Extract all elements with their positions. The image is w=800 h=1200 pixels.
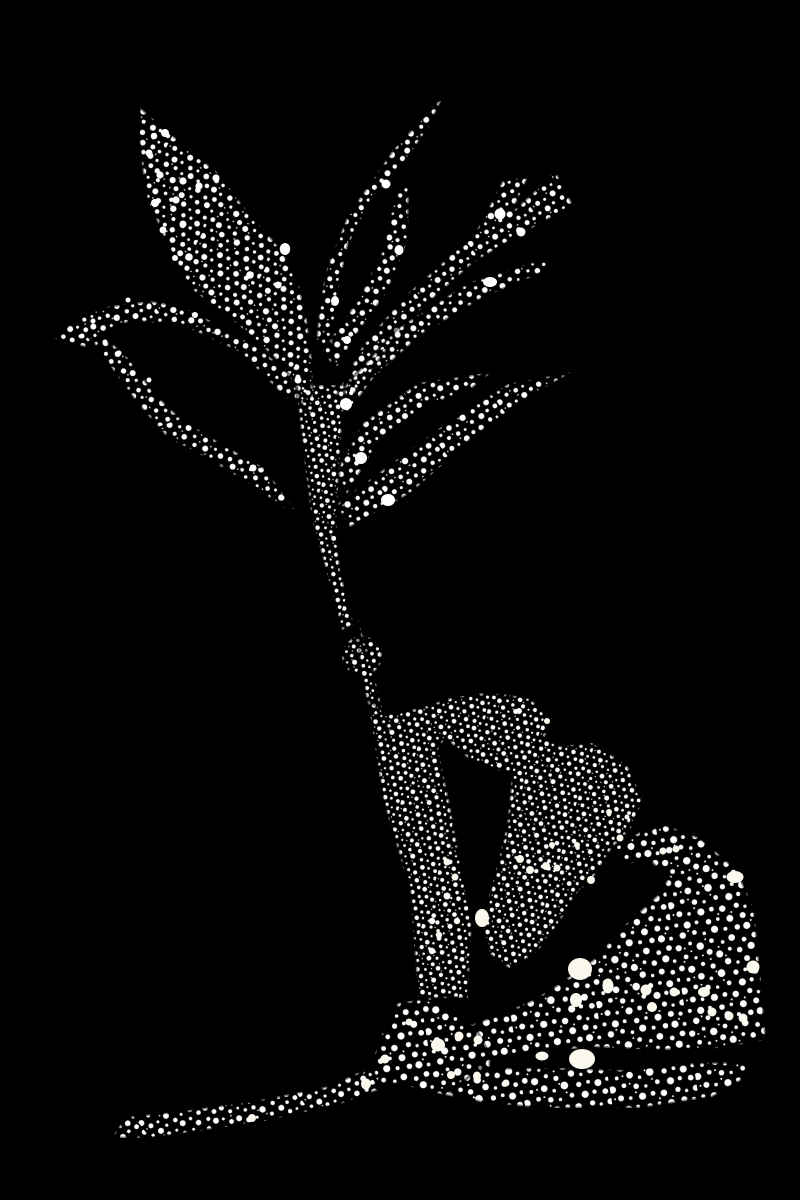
large upper-left leaf: [135, 103, 313, 400]
central inner leaf: [323, 183, 409, 370]
large accent dots on figure: [248, 708, 760, 1122]
stem: [296, 385, 354, 630]
base of body: [370, 998, 490, 1102]
stem node: [342, 636, 382, 676]
arm, shoulder, head and torso: [368, 692, 643, 998]
right long thin leaf: [343, 258, 548, 414]
left curved leaf lower band: [90, 338, 295, 509]
plant: leaves and stem: [53, 95, 573, 716]
lowest right leaf: [336, 372, 572, 527]
large accent dots on plant: [80, 129, 526, 506]
right upper branching leaf: [336, 170, 573, 395]
right body and neck: [468, 825, 766, 1062]
left curved leaf upper band: [53, 301, 305, 405]
bottom band: [450, 1062, 750, 1108]
tail stroke: [112, 1066, 378, 1138]
figure: crouching body: [112, 692, 766, 1138]
lower right leaf: [336, 372, 492, 494]
central thin leaf: [316, 95, 444, 345]
lower stem: [358, 620, 384, 716]
